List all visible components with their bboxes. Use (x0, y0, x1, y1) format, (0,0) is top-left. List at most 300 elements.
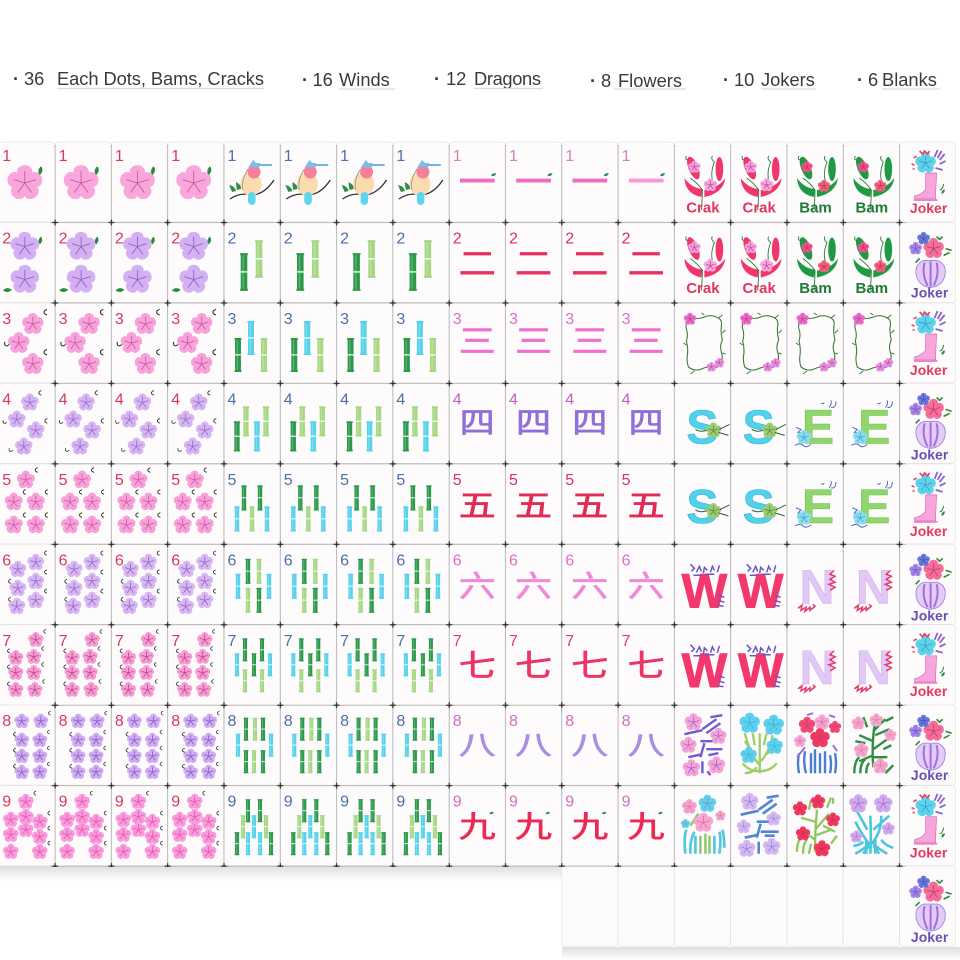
tile: crack 5: 5 (565, 472, 574, 489)
tile: crack 9: 9 (453, 794, 462, 811)
tile: west wind: W (738, 565, 784, 618)
tile: dot 5 (55, 464, 111, 544)
tile: crack 7 (562, 625, 618, 705)
tile: crack 5: 5 (453, 472, 462, 489)
tile: crack 2 (506, 222, 562, 302)
tile: dot 3 (168, 303, 224, 383)
tile: bam 9 (280, 786, 336, 866)
tile: joker vase: Joker (911, 929, 949, 945)
tile: dot 7 (111, 625, 167, 705)
tile: dot 9 (55, 786, 111, 866)
tile: bam 1 bird: 1 (340, 148, 349, 165)
tile: dot 2: 2 (171, 230, 180, 248)
legend item: 12 dragons: Dragons (474, 68, 541, 89)
tile: crack 9: 9 (622, 794, 631, 811)
tile: crack 8: 8 (622, 713, 631, 730)
tile: crack 6: 六 (571, 571, 608, 603)
tile: east wind: E (802, 481, 834, 534)
tile: east wind (787, 383, 843, 463)
tile: east wind (787, 464, 843, 544)
tile: crack 8: 八 (459, 731, 496, 760)
tile: dot 2 (0, 222, 55, 302)
tile: crack 7: 七 (571, 649, 608, 683)
panel: dragons (674, 142, 899, 383)
tile: blank (843, 866, 899, 946)
tile: crak dragon: Crak (686, 200, 720, 216)
tile: blank (787, 866, 843, 946)
tile: joker boot: Joker (910, 362, 948, 378)
tile: bam 8 (393, 705, 449, 785)
tile: bam 2 (280, 222, 336, 302)
tile: dot 3: 3 (115, 311, 124, 328)
tile: crack 6 (618, 544, 674, 624)
tile: dot 8: 8 (171, 713, 180, 730)
tile: dot 8 (168, 705, 224, 785)
tile: crack 3: 三 (628, 325, 665, 359)
tile: dot 4 (168, 383, 224, 463)
tile: bam 9 (224, 786, 280, 866)
tile: dot 7 (55, 625, 111, 705)
tile: dot 5: 5 (115, 472, 124, 489)
tile: crak dragon (674, 222, 730, 302)
tile: crack 2 (562, 222, 618, 302)
tile: crack 1: 1 (509, 148, 518, 165)
tile: soap frame dragon (674, 303, 730, 383)
tile: crack 6: 6 (453, 552, 462, 569)
tile: soap frame dragon (843, 303, 899, 383)
tile: bam 8 (337, 705, 393, 785)
tile: bam 7: 7 (228, 633, 236, 650)
tile: dot 3 (0, 303, 55, 383)
tile: joker vase (900, 866, 956, 946)
tile: crack 9: 九 (459, 812, 496, 844)
tile: joker vase (900, 383, 956, 463)
tile: south wind: S (743, 481, 775, 534)
tile: dot 5: 5 (59, 472, 68, 489)
tile: bam dragon (843, 142, 899, 222)
tile: crack 6: 6 (509, 552, 518, 569)
legend item: 6 blanks: Blanks (882, 69, 937, 90)
tile: bam 2: 2 (284, 230, 293, 248)
tile: crack 7: 七 (459, 649, 496, 683)
tile: joker vase (900, 705, 956, 785)
tile: crak dragon (731, 142, 787, 222)
tile: bam dragon (787, 142, 843, 222)
tile: north wind: N (856, 561, 891, 614)
tile: west wind (674, 544, 730, 624)
tile: dot 9 (0, 786, 55, 866)
panel: dots suit (0, 142, 224, 866)
tile: joker boot (900, 464, 956, 544)
tile: west wind (731, 625, 787, 705)
tile: crack 6: 六 (459, 571, 496, 603)
tile: crack 8: 8 (453, 713, 462, 730)
tile: dot 8: 8 (59, 713, 68, 730)
tile: bam 5 (280, 464, 336, 544)
panel: flowers (674, 705, 899, 866)
tile: dot 9 (111, 786, 167, 866)
tile: dot 4: 4 (171, 391, 180, 408)
tile: bam 6: 6 (228, 552, 236, 569)
tile: crack 3: 3 (509, 311, 518, 328)
tile: crack 9 (506, 786, 562, 866)
tile: crack 6: 六 (515, 571, 552, 603)
tile: bam 9: 9 (340, 794, 349, 811)
tile: soap frame dragon (731, 303, 787, 383)
tile: flower lilac and blue (731, 786, 787, 866)
tile: bam 9: 9 (228, 794, 236, 811)
tile: dot 6 (168, 544, 224, 624)
tile: bam dragon: Bam (856, 200, 888, 216)
tile: bam 7: 7 (340, 633, 349, 650)
tile: crack 9: 九 (571, 812, 608, 844)
tile: crack 1 (618, 142, 674, 222)
tile: crack 5 (562, 464, 618, 544)
tile: joker boot: Joker (910, 683, 948, 699)
tile: crack 3 (506, 303, 562, 383)
tile: blank (562, 866, 618, 946)
tile: bam 3 (337, 303, 393, 383)
tile: north wind (787, 544, 843, 624)
tile: north wind (843, 544, 899, 624)
tile: joker vase: Joker (911, 284, 949, 300)
tile: crack 8 (618, 705, 674, 785)
tile: crack 7 (506, 625, 562, 705)
tile: bam 4: 4 (340, 391, 349, 408)
tile: crack 4: 4 (509, 391, 518, 408)
tile: bam 4 (337, 383, 393, 463)
tile: dot 4: 4 (59, 391, 68, 408)
tile: dot 9: 9 (171, 794, 180, 811)
tile: crack 7: 7 (453, 633, 462, 650)
header legend (13, 68, 940, 91)
tile: crack 5 (618, 464, 674, 544)
tile: joker boot: Joker (910, 200, 948, 216)
tile: south wind (674, 383, 730, 463)
legend item: 10 jokers: · (723, 69, 729, 90)
tile: bam 9: 9 (284, 794, 293, 811)
legend item: 8 flowers (590, 70, 686, 91)
tile: dot 1 (111, 142, 167, 222)
tile: crak dragon (674, 142, 730, 222)
tile: bam 8: 8 (396, 713, 405, 730)
tile: dot 9 (168, 786, 224, 866)
tile: west wind: W (738, 645, 784, 698)
tile: bam 5 (224, 464, 280, 544)
tile: crack 4 (618, 383, 674, 463)
tile: dot 4 (0, 383, 55, 463)
tile: bam 3: 3 (340, 311, 349, 328)
tile: bam 4: 4 (284, 391, 293, 408)
tile: bam 1 bird (224, 142, 280, 222)
tile: crak dragon: Crak (743, 200, 777, 216)
tile: soap frame dragon (787, 303, 843, 383)
tile: joker vase: Joker (911, 767, 949, 783)
tile: crack 4: 四 (460, 406, 495, 439)
tile: bam 1 bird (393, 142, 449, 222)
tile: bam 6 (337, 544, 393, 624)
tile: bam 5: 5 (284, 472, 293, 489)
tile: bam 8 (280, 705, 336, 785)
tile: dot 6: 6 (171, 552, 180, 569)
tile: dot 2: 2 (115, 230, 124, 248)
tile: crack 5: 5 (622, 472, 631, 489)
tile: dot 9: 9 (59, 794, 68, 811)
legend item: 36 each dots, bams, cracks: Each Dots, Bams, Cracks (57, 68, 264, 89)
tile: crack 4: 四 (629, 406, 664, 439)
tile: crack 4: 四 (516, 406, 551, 439)
tile: dot 4 (111, 383, 167, 463)
tile: east wind: E (858, 481, 890, 534)
tile: bam 6: 6 (340, 552, 349, 569)
panel: winds (674, 383, 899, 705)
tile: dot 3 (111, 303, 167, 383)
tile: bam 4 (280, 383, 336, 463)
tile: bam 1 bird: 1 (228, 148, 236, 165)
legend item: 36 each dots, bams, cracks: · (13, 68, 19, 89)
tile: east wind: E (802, 401, 834, 454)
tile: crack 8: 8 (509, 713, 518, 730)
tile: crack 4: 四 (572, 406, 607, 439)
tile: west wind: W (682, 565, 728, 618)
tile: crack 2: 二 (515, 247, 552, 282)
tile: crack 1: 1 (622, 148, 631, 165)
tile: dot 2 (168, 222, 224, 302)
tile: dot 1 (0, 142, 55, 222)
tile: flower lilac and cyan (843, 786, 899, 866)
tile: dot 3 (55, 303, 111, 383)
tile: crack 1 (449, 142, 505, 222)
tile: north wind: N (800, 642, 834, 695)
tile: north wind (787, 625, 843, 705)
tile: bam 5: 5 (396, 472, 405, 489)
tile: dot 6: 6 (115, 552, 124, 569)
tile: dot 7 (0, 625, 55, 705)
tile: bam 4: 4 (396, 391, 405, 408)
legend item: 8 flowers: Flowers (618, 70, 682, 91)
tile: crack 2 (449, 222, 505, 302)
tile: crack 6: 6 (622, 552, 631, 569)
tile: dot 8 (0, 705, 55, 785)
tile: north wind (843, 625, 899, 705)
tile: bam 3: 3 (396, 311, 405, 328)
tile: crack 5: 五 (628, 490, 665, 523)
tile: south wind: S (743, 401, 775, 454)
tile: crack 2: 二 (459, 247, 496, 282)
tile: crack 9: 9 (509, 794, 518, 811)
tile: dot 8 (111, 705, 167, 785)
tile: bam 3 (280, 303, 336, 383)
tile: crack 8: 八 (515, 731, 552, 760)
tile: crack 8: 八 (628, 731, 665, 760)
tile: north wind: N (856, 642, 891, 695)
tile: joker vase (900, 544, 956, 624)
tile: crack 9 (618, 786, 674, 866)
tile: bam 2: 2 (340, 230, 349, 248)
legend item: 10 jokers: Jokers (761, 69, 815, 90)
tile: crack 3 (449, 303, 505, 383)
tile: bam dragon (843, 222, 899, 302)
tile: bam 5: 5 (228, 472, 236, 489)
tile: dot 8: 8 (2, 713, 11, 730)
tile: bam 1 bird (280, 142, 336, 222)
tile: crack 2: 2 (453, 230, 462, 248)
tile: joker boot: Joker (910, 845, 948, 861)
tile: crack 1: 1 (453, 148, 462, 165)
tile: bam 5: 5 (340, 472, 349, 489)
tile: crack 2: 二 (571, 247, 608, 282)
tile: crack 7: 7 (622, 633, 631, 650)
tile: dot 2 (111, 222, 167, 302)
tile: bam dragon: Bam (856, 280, 888, 297)
tile: south wind (674, 464, 730, 544)
tile: bam 7 (337, 625, 393, 705)
tile: bam 9 (393, 786, 449, 866)
tile: bam 6 (280, 544, 336, 624)
tile: crack 4 (449, 383, 505, 463)
tile: dot 6: 6 (2, 552, 11, 569)
legend item: 36 each dots, bams, cracks: 36 (24, 68, 44, 89)
tile: dot 4: 4 (115, 391, 124, 408)
tile: crack 5 (506, 464, 562, 544)
tile: bam 3 (224, 303, 280, 383)
tile: crack 3: 3 (622, 311, 631, 328)
tile: bam 4: 4 (228, 391, 236, 408)
tile: dot 1: 1 (171, 148, 180, 165)
tile: blank (674, 866, 730, 946)
tile: crack 8: 8 (565, 713, 574, 730)
tile: crack 1: 一 (515, 162, 552, 203)
tile: blank (731, 866, 787, 946)
tile: bam dragon: Bam (799, 200, 832, 216)
tile: crack 9 (562, 786, 618, 866)
tile: crack 2: 二 (628, 247, 665, 282)
tile: crack 3: 三 (571, 325, 608, 359)
tile: dot 8 (55, 705, 111, 785)
tile: dot 1 (55, 142, 111, 222)
tile: bam dragon: Bam (799, 280, 832, 297)
tile: crack 7: 七 (515, 649, 552, 683)
tile: dot 1: 1 (59, 148, 68, 165)
legend item: 16 winds: 16 (312, 69, 333, 90)
tile: bam 5 (337, 464, 393, 544)
tile: crak dragon (731, 222, 787, 302)
tile: crack 7 (618, 625, 674, 705)
tile: dot 4 (55, 383, 111, 463)
tile: joker boot (900, 786, 956, 866)
tile: bam 8 (224, 705, 280, 785)
tile: bam 2 (393, 222, 449, 302)
tile: east wind (843, 464, 899, 544)
tile: crack 3: 三 (459, 325, 496, 359)
legend item: 8 flowers: 8 (601, 70, 611, 91)
panel: jokers (900, 142, 956, 946)
legend item: 12 dragons: · (434, 68, 440, 89)
tile: dot 8: 8 (115, 713, 124, 730)
tile: bam 2 (337, 222, 393, 302)
tile: crack 5: 五 (459, 490, 496, 523)
tile: bam 3 (393, 303, 449, 383)
tile: crack 3: 3 (453, 311, 462, 328)
tile: crack 1: 1 (565, 148, 574, 165)
tile: dot 5: 5 (171, 472, 180, 489)
tile: blank (618, 866, 674, 946)
panel: cracks suit (449, 142, 674, 866)
tile: crack 7: 7 (565, 633, 574, 650)
tile: bam 7: 7 (284, 633, 293, 650)
tile: dot 5 (0, 464, 55, 544)
tile: bam 1 bird: 1 (396, 148, 405, 165)
tile: bam dragon (787, 222, 843, 302)
tile: joker boot (900, 142, 956, 222)
tile: crack 9: 9 (565, 794, 574, 811)
tile: dot 7: 7 (171, 633, 180, 650)
tile: dot 6 (111, 544, 167, 624)
tile: bam 2: 2 (396, 230, 405, 248)
tile: flower green and pink (843, 705, 899, 785)
tile: crack 3 (618, 303, 674, 383)
legend item: 10 jokers: 10 (734, 69, 754, 90)
tile: bam 4 (393, 383, 449, 463)
tile: bam 3: 3 (228, 311, 236, 328)
tile: crack 5 (449, 464, 505, 544)
tile: dot 6 (0, 544, 55, 624)
tile: joker boot (900, 303, 956, 383)
tile: bam 7 (393, 625, 449, 705)
tile: dot 2 (55, 222, 111, 302)
panel: bams suit (224, 142, 449, 866)
tile: dot 7: 7 (59, 633, 68, 650)
legend item: 16 winds (302, 69, 395, 90)
tile: crack 2: 2 (509, 230, 518, 248)
tile: dot 2: 2 (2, 230, 11, 248)
tile: crack 1: 一 (571, 162, 608, 203)
legend item: 6 blanks: · (857, 69, 863, 90)
tile: bam 6 (393, 544, 449, 624)
tile: crack 1 (562, 142, 618, 222)
tile: crack 6 (562, 544, 618, 624)
tile: crack 6 (506, 544, 562, 624)
tile: bam 6: 6 (396, 552, 405, 569)
tile: dot 3: 3 (2, 311, 11, 328)
tile: crack 9: 九 (628, 812, 665, 844)
tile: flower red and green (787, 786, 843, 866)
tile: west wind: W (682, 645, 728, 698)
tile: joker boot: Joker (910, 523, 948, 539)
tile: crack 1 (506, 142, 562, 222)
tile: crack 8 (562, 705, 618, 785)
legend item: 6 blanks: 6 (868, 69, 878, 90)
tile: crak dragon: Crak (743, 280, 777, 297)
tile: crack 4: 4 (622, 391, 631, 408)
legend item: 8 flowers: · (590, 70, 596, 91)
tile: crack 4 (562, 383, 618, 463)
tile: crack 4: 4 (453, 391, 462, 408)
panel: blanks (562, 866, 899, 946)
tile: north wind: N (800, 561, 834, 614)
tile: joker vase (900, 222, 956, 302)
tile: crack 1: 一 (459, 162, 496, 203)
tile: west wind (674, 625, 730, 705)
tile: flower cyan and green (731, 705, 787, 785)
tile: bam 7 (280, 625, 336, 705)
tile: bam 8: 8 (340, 713, 349, 730)
tile: dot 6: 6 (59, 552, 68, 569)
tile: crack 2: 2 (622, 230, 631, 248)
tile: dot 5: 5 (2, 472, 11, 489)
tile: joker vase: Joker (911, 607, 949, 623)
tile: bam 7 (224, 625, 280, 705)
